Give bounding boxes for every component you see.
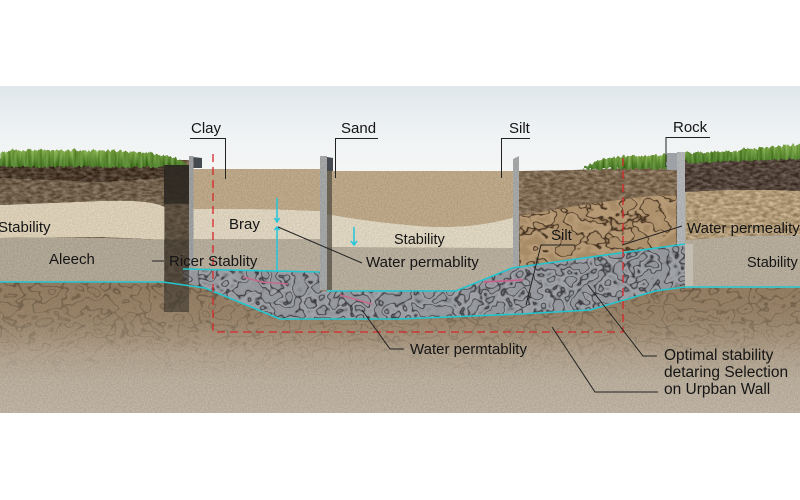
icon: grass left [0,150,190,167]
sheet pile: clay [189,156,202,269]
label: Clay: Clay [191,120,222,137]
label: Rock: Rock [673,119,708,136]
panel: left natural soil layers [0,160,190,282]
label: Silt inner: Silt [551,227,573,244]
panel: right natural soil layers [685,156,800,288]
dark retaining wall [164,165,189,312]
label: Stability right: Stability [747,255,799,271]
icon: cyan arrow pair [274,198,280,272]
panel: clay section [193,169,320,273]
sheet pile: sand [320,156,333,290]
infographic: soil cross-section [0,86,800,413]
deep ground [0,280,800,413]
label: Stability middle: Stability [394,232,446,248]
label: Water permeality: Water permeality [687,220,800,237]
label: Bray: Bray [229,216,260,233]
red dashed boundary [213,153,623,332]
cyan boundary lines [0,244,800,319]
sheet pile: silt [513,156,519,268]
callout: optimal stability: Optimal stability [664,347,773,364]
sheet pile: rock [667,152,693,287]
label: Sand: Sand [341,120,376,137]
label: Silt top: Silt [509,120,531,137]
label: Water permtablity lower: Water permtablity [410,341,527,358]
callout: optimal stability: detaring Selection [664,364,788,381]
leader lines [152,138,710,392]
panel: rock section [519,165,680,268]
panel: sand section [327,171,515,291]
label: Ricer Stablity: Ricer Stablity [169,253,258,270]
icon: grass right [685,144,800,163]
icon: grass middle right [584,155,668,169]
callout: optimal stability: on Urpban Wall [664,381,770,398]
icon: cyan down arrow [351,227,357,245]
label: Water permablity upper: Water permablity [366,254,479,271]
gravel trench fill [183,244,685,319]
sky [0,86,800,186]
label: Aleech: Aleech [49,251,95,268]
